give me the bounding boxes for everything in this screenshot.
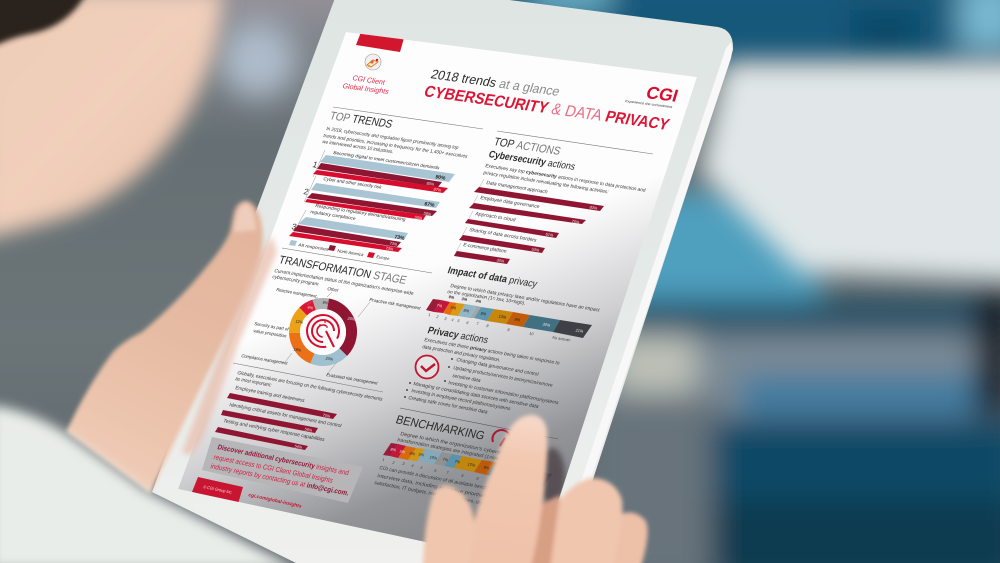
stacked bar: 4% bbox=[475, 298, 483, 304]
bar: testing: Testing and verifying cyber response capabilities bbox=[222, 418, 326, 443]
CGI Client Global Insights logo: CGI Client bbox=[351, 73, 386, 87]
stacked bar: 3% bbox=[461, 296, 469, 302]
trend 2: 2 bbox=[302, 187, 310, 197]
heading: TOP ACTIONS bbox=[492, 136, 562, 158]
description: Degree to which data privacy laws and/or regulations have an impact bbox=[449, 283, 601, 314]
shoulder: white shirt bbox=[0, 405, 300, 563]
main title: CYBERSECURITY & DATA PRIVACY bbox=[422, 82, 672, 134]
panel: impact of data privacy bbox=[426, 265, 601, 343]
bar: testing: 54% bbox=[294, 443, 304, 450]
icon: globe bbox=[365, 54, 381, 70]
icon: gauge bbox=[492, 430, 510, 446]
donut labels: value proposition bbox=[253, 328, 288, 339]
bullet list: Creating safe zones for sensitive data bbox=[407, 395, 489, 416]
stacked bar: 21% bbox=[575, 328, 585, 334]
icon: check mark bbox=[416, 356, 438, 378]
bullet list: Investing in employee record platforms/systems bbox=[410, 388, 512, 412]
bar: e-commerce bbox=[454, 242, 510, 264]
shadow between fingers bbox=[530, 495, 560, 563]
person: head and neck bbox=[0, 0, 222, 240]
stacked bar: 8% bbox=[463, 308, 471, 313]
right hand fingers bbox=[423, 415, 648, 563]
scale ticks: 9 bbox=[507, 327, 510, 332]
description: Globally, executives are focusing on the following cybersecurity elements bbox=[236, 370, 384, 403]
bar: data management: Data management approach bbox=[485, 180, 549, 195]
bar: sharing across borders: 53% bbox=[531, 247, 541, 253]
stacked bar: 13% bbox=[498, 314, 508, 320]
subheading: Cybersecurity actions bbox=[487, 149, 577, 173]
bullet list: Managing or consolidating data sources with sensitive data bbox=[412, 381, 540, 410]
bullet list: Investing in customer information platforms/systems bbox=[447, 380, 560, 406]
scale ticks bbox=[428, 312, 572, 343]
bar: employee data governance: 75% bbox=[571, 219, 581, 225]
bar: approach to cloud: Approach to cloud bbox=[474, 211, 517, 223]
bar: data management bbox=[474, 179, 604, 211]
heading: BENCHMARKING bbox=[394, 412, 487, 443]
legend: All responses bbox=[298, 242, 329, 252]
donut labels bbox=[241, 286, 422, 386]
trend 3: regulatory compliance bbox=[310, 209, 357, 221]
scale ticks: 7 bbox=[476, 321, 479, 326]
trend 2: 59% bbox=[423, 211, 433, 217]
CGI brand logo bbox=[625, 86, 678, 108]
description: Degree to which the organization's cybersecurity and bbox=[399, 431, 527, 461]
stacked bar: 30% bbox=[542, 322, 552, 328]
donut labels: Other bbox=[327, 286, 340, 293]
panel: top actions bbox=[454, 131, 653, 264]
icon: radar target bbox=[306, 314, 340, 348]
scale ticks: 5 bbox=[457, 318, 461, 323]
bar: employee training bbox=[227, 385, 337, 419]
trend 3 bbox=[289, 203, 408, 252]
bar: employee training: 75% bbox=[322, 412, 332, 419]
panel: benchmarking bbox=[373, 408, 558, 510]
trend 3: 73% bbox=[385, 246, 395, 252]
stacked bar: 12% bbox=[467, 461, 477, 468]
intro text: we interviewed across 10 industries. bbox=[321, 139, 394, 155]
scale ticks: 10 bbox=[529, 331, 535, 336]
trend 3: 3 bbox=[290, 222, 298, 232]
stacked bar: 9% bbox=[448, 294, 456, 300]
scale ticks: 2 bbox=[392, 460, 395, 465]
thumb bbox=[423, 485, 474, 563]
heading: Privacy actions bbox=[426, 325, 490, 346]
scale ticks: No answer bbox=[552, 335, 572, 343]
closing paragraph: CGI can provide a discussion of all available benchmarking bbox=[378, 465, 506, 495]
donut labels: Reactive management bbox=[276, 287, 318, 299]
tablet screen bbox=[178, 32, 697, 563]
description: on the organization (1= low, 10=high). bbox=[446, 289, 526, 307]
scale ticks: 3 bbox=[402, 461, 406, 466]
CGI brand logo: Experience the commitment bbox=[625, 99, 673, 109]
index finger bbox=[467, 415, 547, 563]
heading: TOP TRENDS bbox=[328, 110, 394, 131]
stacked bar: 10% bbox=[429, 454, 439, 461]
trend 1: 1 bbox=[311, 160, 319, 170]
bullet list: Updating products/services to anonymize/remove bbox=[452, 365, 554, 389]
hand reflection on tablet edge bbox=[182, 236, 277, 456]
trend 2: 67% bbox=[423, 201, 436, 209]
legend: North America bbox=[337, 248, 365, 257]
middle finger bbox=[530, 478, 622, 563]
scale ticks: 6 bbox=[434, 468, 438, 473]
closing paragraph: satisfaction, IT budgets, investment priorities, digitization bbox=[373, 480, 501, 510]
donut chart: 19% bbox=[293, 346, 302, 353]
trend 1: 90% bbox=[434, 174, 447, 182]
trend 2: 55% bbox=[414, 215, 424, 221]
callout: discover more: industry reports by contacting us at info@cgi.com. bbox=[209, 462, 350, 498]
donut chart: 26% bbox=[347, 315, 356, 322]
bar: approach to cloud: 61% bbox=[545, 232, 555, 238]
trend 2: Cyber and other security risk bbox=[323, 176, 383, 190]
stacked bar: 6% bbox=[409, 451, 417, 457]
description: Executives say top cybersecurity actions in response to data protection and bbox=[484, 163, 647, 194]
bar: e-commerce: 35% bbox=[496, 258, 506, 264]
scale ticks: 8 bbox=[461, 473, 465, 478]
donut labels: Evaluated risk management bbox=[326, 372, 379, 386]
scale ticks: 4 bbox=[451, 317, 455, 322]
CGI brand logo: CGI bbox=[644, 82, 681, 106]
CGI Client Global Insights logo: Global Insights bbox=[341, 81, 391, 96]
bar: employee data governance bbox=[469, 195, 586, 225]
panel: cybersecurity elements bbox=[215, 363, 384, 450]
intro text: In 2018, cybersecurity and regulation figure prominently among top bbox=[325, 126, 460, 151]
bar: sharing across borders: Sharing of data across borders bbox=[468, 227, 538, 244]
stacked bar: 8% bbox=[390, 447, 398, 453]
trend 1: 85% bbox=[426, 181, 436, 187]
trend 3: 73% bbox=[389, 241, 399, 247]
ring finger bbox=[590, 512, 648, 563]
donut labels: Proactive risk management bbox=[369, 297, 422, 311]
legend: Europe bbox=[376, 254, 391, 261]
stacked bar: 7% bbox=[454, 459, 462, 465]
bar: approach to cloud bbox=[465, 211, 559, 238]
bullet list: sensitive data bbox=[451, 373, 482, 384]
CGI Client Global Insights logo bbox=[343, 54, 389, 94]
left hand and thumb bbox=[66, 201, 263, 494]
bar: employee training: Employee training and awareness bbox=[234, 385, 306, 404]
subtitle: 2018 trends at a glance bbox=[429, 66, 562, 99]
stacked bar: 5% bbox=[399, 449, 407, 455]
scale ticks bbox=[382, 457, 479, 481]
description: Current implementation status of the organization's enterprise-wide bbox=[273, 268, 415, 297]
intro text: trends and priorities, increasing in frequency for the 1,400+ executives bbox=[322, 133, 469, 160]
scale ticks: 1 bbox=[382, 457, 385, 462]
stacked bar: 8% bbox=[514, 317, 522, 322]
heading: Impact of data privacy bbox=[446, 265, 539, 290]
stacked bar: 7% bbox=[442, 457, 450, 463]
trend 1: Becoming digital to meet customer/citizen demands bbox=[333, 150, 441, 170]
scale ticks: 3 bbox=[444, 316, 448, 321]
bar: data management: 83% bbox=[589, 205, 599, 211]
description: cybersecurity program bbox=[271, 274, 319, 288]
scale ticks: 2 bbox=[436, 314, 439, 319]
callout: discover more bbox=[202, 437, 363, 503]
bar: employee data governance: Employee data governance bbox=[479, 195, 541, 210]
description: as most important: bbox=[234, 376, 272, 389]
donut labels: Compliance management bbox=[241, 353, 289, 366]
stacked bar: 9% bbox=[480, 311, 488, 316]
description: privacy regulation include reevaluating the following activities: bbox=[482, 170, 609, 195]
trend 1: 87% bbox=[433, 187, 443, 193]
tablet body bbox=[152, 0, 733, 563]
callout: discover more: request access to CGI Client Global Insights bbox=[212, 453, 334, 485]
scale ticks: 7 bbox=[446, 470, 449, 475]
finger shadow bbox=[539, 448, 565, 504]
donut chart: 6% bbox=[307, 305, 314, 311]
bar: sharing across borders bbox=[459, 227, 545, 253]
stacked bar bbox=[426, 294, 592, 338]
closing paragraph bbox=[373, 465, 506, 510]
scale ticks: 9 bbox=[476, 476, 479, 481]
description: data protection and privacy regulation. bbox=[421, 344, 501, 364]
scale ticks: 6 bbox=[466, 320, 470, 325]
trend 1 bbox=[311, 150, 455, 193]
donut chart: 9% bbox=[322, 300, 329, 306]
stacked bar: 9% bbox=[483, 465, 491, 471]
red header tab bbox=[356, 32, 404, 52]
legend bbox=[289, 240, 391, 261]
bar: e-commerce: E-commerce platform bbox=[462, 242, 507, 255]
stacked bar: 5% bbox=[450, 305, 458, 310]
bar: critical assets: Identifying critical assets for management and control bbox=[228, 402, 342, 429]
panel: transformation stage bbox=[241, 248, 432, 386]
bar: critical assets: 56% bbox=[304, 426, 314, 433]
footer: © CGI Group Inc. bbox=[203, 484, 233, 495]
panel: top trends bbox=[289, 107, 483, 261]
callout: discover more: Discover additional cybersecurity insights and bbox=[216, 443, 350, 477]
donut chart: 12% bbox=[295, 318, 304, 325]
stacked bar: 7% bbox=[436, 303, 444, 308]
footer bbox=[192, 477, 303, 510]
tablet right edge highlight bbox=[553, 42, 732, 563]
description: Executives cite these privacy actions being taken in response to bbox=[423, 337, 561, 367]
stacked bar bbox=[383, 443, 552, 486]
bullet list: Changing data governance and control bbox=[455, 357, 539, 378]
closing paragraph: interview data, including executive priorities, client bbox=[376, 473, 504, 503]
donut chart: 20% bbox=[325, 355, 334, 362]
scale ticks: 8 bbox=[486, 323, 490, 328]
trend 3: Responding to regulatory demands/assuring bbox=[315, 203, 407, 222]
scale ticks: 1 bbox=[428, 312, 431, 317]
footer: cgi.com/global-insights bbox=[247, 492, 303, 510]
heading: TRANSFORMATION STAGE bbox=[277, 254, 408, 287]
description: transformation strategies are integrated (1=low, 10=high). bbox=[396, 437, 523, 467]
donut labels: Security as part of bbox=[254, 321, 290, 332]
stacked bar: 5% bbox=[418, 452, 426, 458]
donut chart bbox=[241, 286, 422, 386]
trend 2 bbox=[302, 176, 440, 221]
scale ticks: 4 bbox=[411, 463, 415, 468]
bullet list bbox=[404, 357, 560, 416]
trend 3: 73% bbox=[393, 234, 406, 242]
scale ticks: 5 bbox=[420, 465, 424, 470]
panel: privacy actions bbox=[404, 325, 561, 416]
